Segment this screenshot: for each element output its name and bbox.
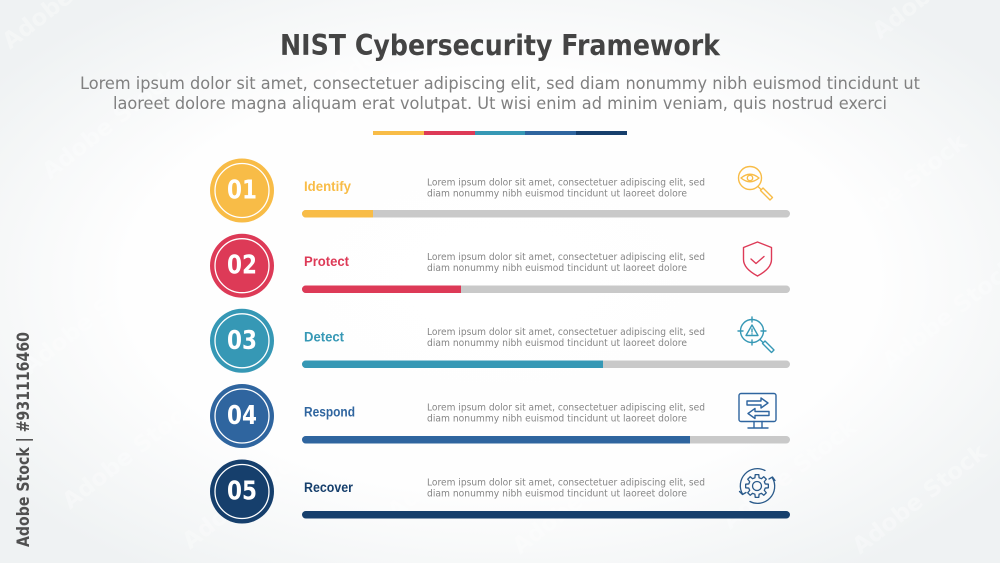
infographic canvas: Adobe Stock <box>18 259 162 380</box>
infographic canvas: Adobe Stock <box>178 434 322 555</box>
infographic canvas: Adobe Stock <box>338 274 482 395</box>
infographic canvas: Adobe Stock <box>498 119 642 240</box>
number badge 03 <box>210 309 274 373</box>
infographic canvas: Adobe Stock <box>508 439 652 560</box>
description: diam nonummy nibh euismod tincidunt ut laoreet dolore <box>427 338 687 349</box>
label: Identify: Identify <box>304 179 351 194</box>
subtitle text <box>80 74 920 114</box>
infographic canvas: Adobe Stock <box>678 284 822 405</box>
description: Lorem ipsum dolor sit amet, consectetuer adipiscing elit, sed <box>427 178 705 188</box>
description: Lorem ipsum dolor sit amet, consectetuer adipiscing elit, sed <box>427 252 705 263</box>
infographic canvas: Adobe Stock <box>38 64 182 185</box>
description <box>427 402 705 424</box>
number badge 05 <box>210 460 274 524</box>
description <box>427 178 705 200</box>
description <box>427 327 705 349</box>
number badge 05: 05 <box>227 476 257 506</box>
number badge 04 <box>210 384 274 448</box>
icon: magnifier with eye <box>738 166 772 200</box>
label: Protect: Protect <box>304 254 349 269</box>
label: Detect: Detect <box>304 330 344 344</box>
number badge 02 <box>210 234 274 298</box>
number badge 01 <box>210 158 274 222</box>
infographic canvas: Adobe Stock <box>848 439 992 560</box>
title: NIST Cybersecurity Framework <box>280 29 721 62</box>
label: Respond: Respond <box>304 404 355 420</box>
subtitle text: laoreet dolore magna aliquam erat volutpat. Ut wisi enim ad minim veniam, quis nostrud exerci <box>113 94 887 114</box>
progress bar <box>302 360 790 368</box>
infographic canvas: Adobe Stock <box>378 79 522 200</box>
infographic canvas: Adobe <box>328 24 408 95</box>
description: diam nonummy nibh euismod tincidunt ut laoreet dolore <box>427 188 687 200</box>
description: diam nonummy nibh euismod tincidunt ut laoreet dolore <box>427 414 687 424</box>
progress bar <box>302 436 790 444</box>
number badge 04: 04 <box>227 401 257 431</box>
progress bar <box>302 511 790 518</box>
subtitle text: Lorem ipsum dolor sit amet, consectetuer adipiscing elit, sed diam nonummy nibh euismod tincidunt ut <box>80 74 920 94</box>
row 2: Protect <box>210 234 790 298</box>
description: Lorem ipsum dolor sit amet, consectetuer adipiscing elit, sed <box>427 478 705 488</box>
stock id side text: Adobe Stock | #931116460 <box>14 332 34 547</box>
colored divider <box>373 131 627 135</box>
infographic canvas: Adobe Stock <box>718 414 862 535</box>
icon: gear with circular arrows <box>740 469 775 503</box>
description: diam nonummy nibh euismod tincidunt ut laoreet dolore <box>427 263 687 274</box>
description: Lorem ipsum dolor sit amet, consectetuer adipiscing elit, sed <box>427 327 705 338</box>
icon: monitor with arrows <box>739 394 776 428</box>
row 4: Respond <box>210 384 790 448</box>
row 3: Detect <box>210 309 790 373</box>
description: diam nonummy nibh euismod tincidunt ut laoreet dolore <box>427 488 687 500</box>
label: Recover: Recover <box>304 480 354 495</box>
infographic canvas: Adobe Stock <box>58 394 202 515</box>
row 5: Recover <box>210 460 790 524</box>
infographic canvas: Adobe Stock <box>178 109 322 230</box>
description <box>427 478 705 500</box>
icon: target magnifier with warning <box>738 317 774 352</box>
description <box>427 252 705 274</box>
number badge 03: 03 <box>227 326 257 356</box>
number badge 02: 02 <box>227 251 257 281</box>
number badge 01: 01 <box>227 176 257 206</box>
progress bar <box>302 286 790 293</box>
infographic canvas: Adobe Stock <box>828 129 972 250</box>
description: Lorem ipsum dolor sit amet, consectetuer adipiscing elit, sed <box>427 402 705 414</box>
progress bar <box>302 210 790 218</box>
icon: shield with check <box>744 242 772 276</box>
row 1: Identify <box>210 158 790 222</box>
infographic canvas: Adobe Stock <box>383 404 527 525</box>
